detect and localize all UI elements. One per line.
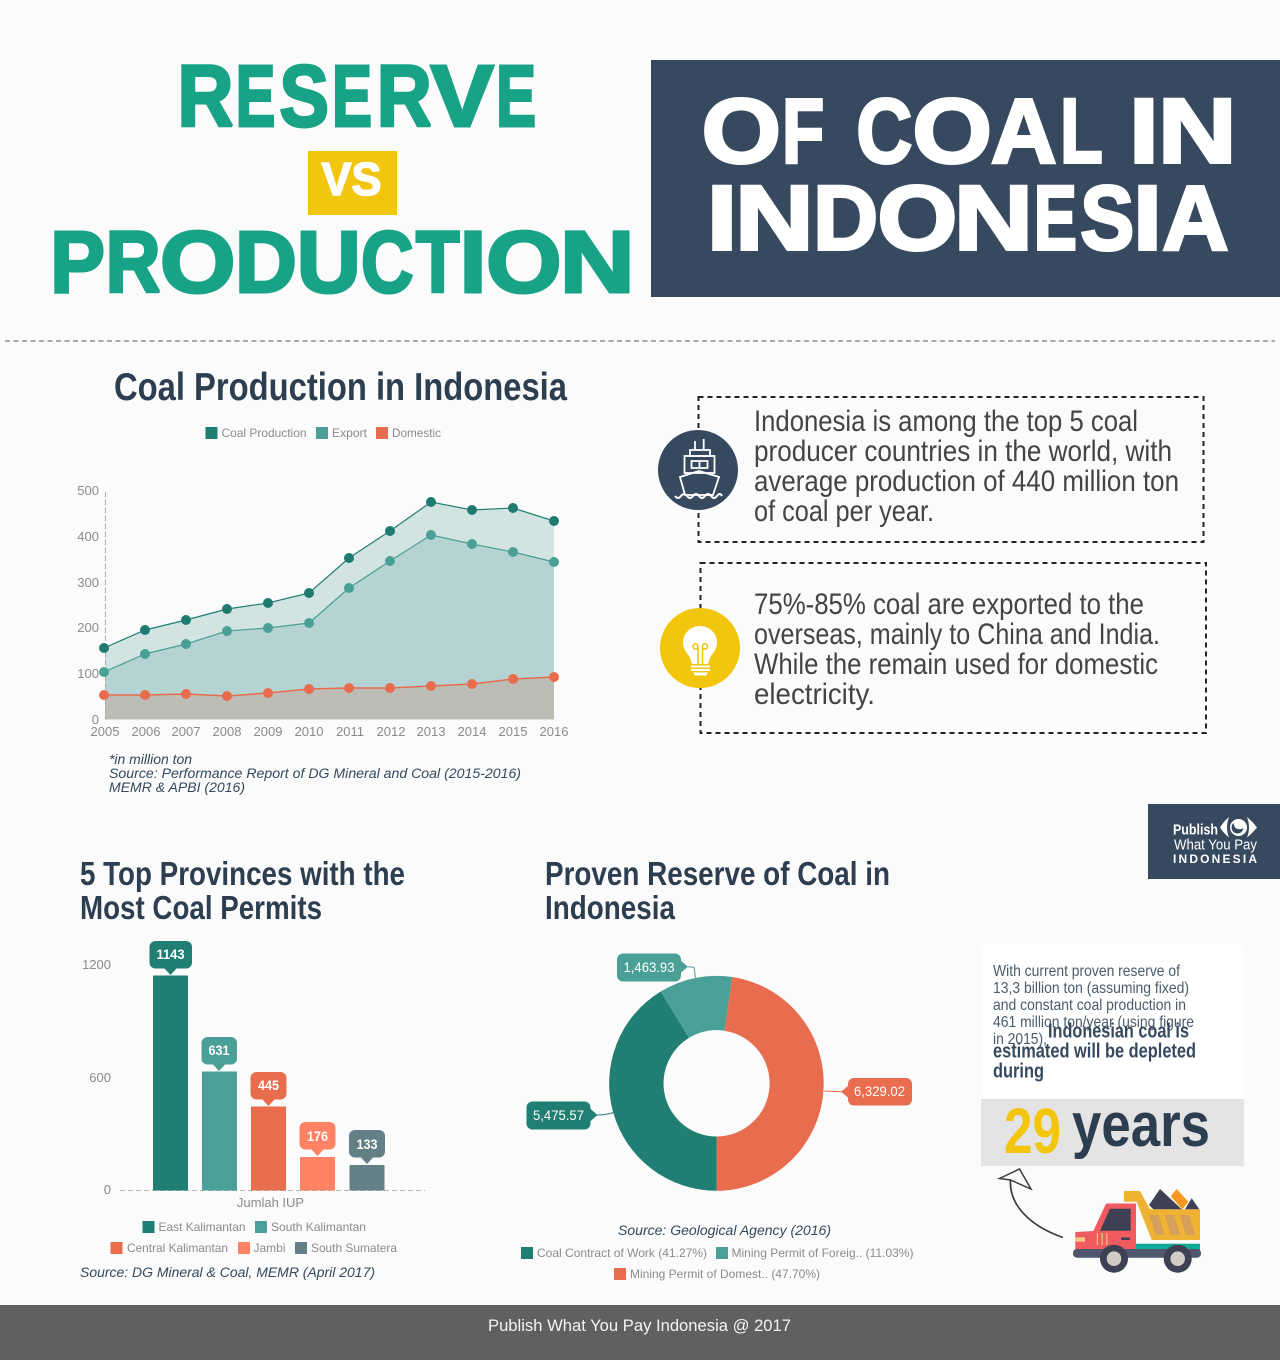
title banner: of coal in Indonesia: E — [1034, 168, 1077, 270]
title: reserve vs production: S — [280, 48, 329, 145]
chart note and source: Source: Performance Report of DG Mineral and Coal (2015-2016) — [109, 766, 521, 781]
heading: proven reserve — [545, 855, 890, 926]
area chart: production, export, domestic: 2013 — [417, 724, 445, 739]
heading: proven reserve: Indonesia — [545, 889, 676, 926]
area chart: production, export, domestic: 100 — [77, 666, 99, 681]
heading: coal production: Coal Production in Indonesia — [114, 366, 567, 409]
donut chart: proven reserve: 1,463.93 — [624, 960, 674, 975]
heading: top provinces: 5 Top Provinces with the — [80, 855, 405, 892]
donut legend: Mining Permit of Domest.. (47.70%) — [630, 1267, 820, 1281]
heading: top provinces — [80, 855, 405, 926]
title: reserve vs production: T — [416, 214, 460, 311]
heading: top provinces: Most Coal Permits — [80, 889, 322, 926]
donut legend: Mining Permit of Foreig.. (11.03%) — [732, 1246, 914, 1260]
area chart: production, export, domestic: 300 — [77, 575, 99, 590]
title banner: of coal in Indonesia: A — [1162, 168, 1229, 270]
chart legend: coal production — [206, 426, 441, 440]
title banner: of coal in Indonesia: F — [782, 80, 824, 182]
donut legend: Coal Contract of Work (41.27%) — [537, 1246, 707, 1260]
title: reserve vs production: R — [377, 48, 432, 145]
title: reserve vs production: I — [460, 214, 486, 311]
panel: depletion estimate: estimated will be depleted — [993, 1040, 1196, 1062]
chart legend: coal production: Domestic — [392, 426, 441, 440]
area chart: production, export, domestic: 0 — [92, 712, 99, 727]
title banner: of coal in Indonesia: D — [813, 168, 878, 270]
area chart: production, export, domestic: 2005 — [91, 724, 119, 739]
panel: top 5 producer fact — [698, 397, 1204, 542]
panel: depletion estimate: 29 — [1004, 1095, 1061, 1167]
title banner: of coal in Indonesia: O — [912, 80, 992, 182]
panel: export fact — [700, 563, 1206, 733]
footer — [0, 1305, 1280, 1360]
title: reserve vs production: VS — [322, 153, 382, 205]
area chart: production, export, domestic: 2010 — [295, 724, 323, 739]
donut source: Source: Geological Agency (2016) — [618, 1223, 831, 1238]
arrow: hand drawn — [1000, 1169, 1063, 1238]
title banner: of coal in Indonesia: N — [735, 168, 814, 270]
panel: depletion estimate: years — [1072, 1091, 1210, 1160]
area chart: production, export, domestic: 2008 — [213, 724, 241, 739]
chart note and source: *in million ton — [109, 752, 192, 767]
panel: depletion estimate: and constant coal production in — [993, 997, 1186, 1014]
chart note and source: MEMR & APBI (2016) — [109, 780, 245, 795]
chart note and source — [109, 752, 521, 795]
bar chart: coal permits by province: 133 — [356, 1137, 378, 1152]
panel: depletion estimate — [981, 945, 1244, 1167]
panel: export fact: 75%-85% coal are exported to the — [754, 588, 1144, 621]
title: reserve vs production: D — [235, 214, 297, 311]
area chart: production, export, domestic: 400 — [77, 529, 99, 544]
chart legend: coal production: Export — [332, 426, 368, 440]
donut legend — [521, 1246, 914, 1281]
bar chart legend: Jambi — [254, 1241, 286, 1255]
donut chart: proven reserve — [526, 954, 912, 1191]
title banner: of coal in Indonesia: S — [1080, 168, 1134, 270]
area chart: production, export, domestic: 2006 — [132, 724, 160, 739]
title: reserve vs production: O — [486, 214, 562, 311]
area chart: production, export, domestic: 2014 — [458, 724, 486, 739]
area chart: production, export, domestic: 2009 — [254, 724, 282, 739]
panel: top 5 producer fact: Indonesia is among the top 5 coal — [754, 405, 1138, 438]
donut chart: proven reserve: 6,329.02 — [854, 1084, 905, 1099]
bar chart legend: East Kalimantan — [158, 1220, 246, 1234]
panel: depletion estimate: during — [993, 1060, 1044, 1082]
panel: top 5 producer fact: of coal per year. — [754, 495, 934, 528]
bar chart: coal permits by province: 631 — [208, 1043, 230, 1058]
title banner: of coal in Indonesia: N — [954, 168, 1033, 270]
area chart: production, export, domestic — [77, 483, 568, 739]
area chart: production, export, domestic: 2015 — [499, 724, 527, 739]
area chart: production, export, domestic: 500 — [77, 483, 99, 498]
bar chart: coal permits by province: 176 — [307, 1129, 328, 1144]
icon: light bulb — [660, 608, 740, 688]
panel: depletion estimate: With current proven reserve of — [993, 963, 1180, 980]
logo: Publish What You Pay Indonesia: INDONESIA — [1173, 852, 1257, 866]
bar chart: coal permits by province: 1200 — [82, 957, 111, 972]
title: reserve vs production: U — [297, 214, 361, 311]
panel: export fact: overseas, mainly to China and India. — [754, 618, 1160, 651]
title banner: of coal in Indonesia: I — [1129, 80, 1159, 182]
footer: Publish What You Pay Indonesia @ 2017 — [488, 1316, 791, 1335]
icon: coal truck — [1073, 1189, 1201, 1273]
bar chart: coal permits by province: 600 — [89, 1070, 111, 1085]
title: reserve vs production: O — [160, 214, 236, 311]
title: reserve vs production: N — [560, 214, 635, 311]
bar chart: coal permits by province: Jumlah IUP — [237, 1195, 304, 1210]
bar chart legend: South Sumatera — [311, 1241, 397, 1255]
title: reserve vs production: P — [50, 214, 105, 311]
title: reserve vs production: E — [332, 48, 372, 145]
title banner: of coal in Indonesia: O — [702, 80, 781, 182]
panel: depletion estimate: Indonesian coal is — [1048, 1020, 1189, 1042]
title banner: of coal in Indonesia: I — [1133, 168, 1162, 270]
panel: export fact: electricity. — [754, 678, 875, 711]
logo: Publish What You Pay Indonesia — [1148, 804, 1280, 879]
title banner: of coal in Indonesia: C — [856, 80, 912, 182]
title banner: of coal in Indonesia: N — [1158, 80, 1237, 182]
title: reserve vs production: E — [496, 48, 536, 145]
panel: export fact: While the remain used for domestic — [754, 648, 1158, 681]
area chart: production, export, domestic: 2016 — [540, 724, 568, 739]
bar chart legend: Central Kalimantan — [127, 1241, 228, 1255]
chart legend: coal production: Coal Production — [222, 426, 306, 440]
area chart: production, export, domestic: 2007 — [172, 724, 200, 739]
panel: top 5 producer fact: average production of 440 million ton — [754, 465, 1179, 498]
title: reserve vs production: R — [106, 214, 161, 311]
title: reserve vs production — [50, 48, 635, 311]
bar chart legend — [110, 1220, 397, 1255]
title: reserve vs production: E — [236, 48, 275, 145]
title banner: of coal in Indonesia: O — [877, 168, 957, 270]
title banner: of coal in Indonesia: I — [707, 168, 738, 270]
panel: depletion estimate: in 2015), — [993, 1031, 1047, 1048]
title: reserve vs production: V — [431, 48, 494, 145]
area chart: production, export, domestic: 200 — [77, 620, 99, 635]
logo: Publish What You Pay Indonesia: What You Pay — [1174, 838, 1258, 854]
panel: depletion estimate: 461 million ton/year (using figure — [993, 1014, 1194, 1031]
bar chart: coal permits by province — [82, 941, 425, 1210]
bar chart legend: South Kalimantan — [271, 1220, 366, 1234]
donut chart: proven reserve: 5,475.57 — [533, 1108, 584, 1123]
title banner: of coal in Indonesia: A — [991, 80, 1057, 182]
area chart: production, export, domestic: 2011 — [336, 724, 364, 739]
bar chart: coal permits by province: 1143 — [156, 947, 185, 962]
title: reserve vs production: C — [361, 214, 414, 311]
heading: proven reserve: Proven Reserve of Coal in — [545, 855, 890, 892]
title banner: of coal in Indonesia — [651, 60, 1280, 297]
title: reserve vs production: R — [178, 48, 234, 145]
panel: top 5 producer fact: producer countries in the world, with — [754, 435, 1172, 468]
logo: Publish What You Pay Indonesia: Publish — [1173, 822, 1218, 838]
bar chart source: Source: DG Mineral & Coal, MEMR (April 2017) — [80, 1265, 375, 1280]
area chart: production, export, domestic: 2012 — [377, 724, 405, 739]
bar chart: coal permits by province: 445 — [258, 1078, 279, 1093]
bar chart: coal permits by province: 0 — [104, 1182, 111, 1197]
title banner: of coal in Indonesia: L — [1060, 80, 1102, 182]
panel: depletion estimate: 13,3 billion ton (assuming fixed) — [993, 980, 1189, 997]
icon: ship — [658, 430, 738, 510]
